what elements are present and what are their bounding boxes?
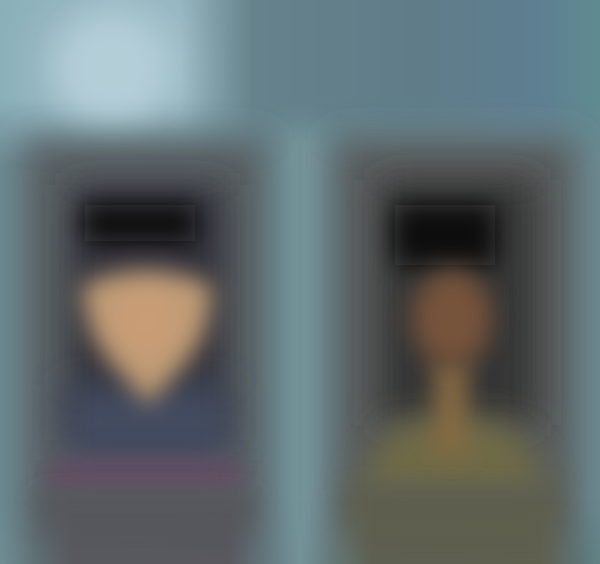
right neck: [434, 360, 468, 455]
bottom edge fill: [38, 532, 600, 564]
right panel: [334, 140, 576, 564]
right dark backdrop: [380, 180, 535, 425]
left dark backdrop: [70, 185, 225, 440]
right portrait: [334, 140, 576, 564]
left face: [82, 270, 212, 405]
left portrait: [24, 140, 266, 564]
right shoulders: [352, 420, 555, 490]
left hair: [85, 205, 195, 241]
left jacket: [65, 385, 230, 460]
left purple band: [50, 462, 240, 486]
right hair: [395, 205, 495, 265]
left panel: [24, 140, 266, 564]
left lower panel: [40, 495, 252, 564]
right face: [412, 270, 492, 366]
right lower panel: [345, 490, 560, 564]
